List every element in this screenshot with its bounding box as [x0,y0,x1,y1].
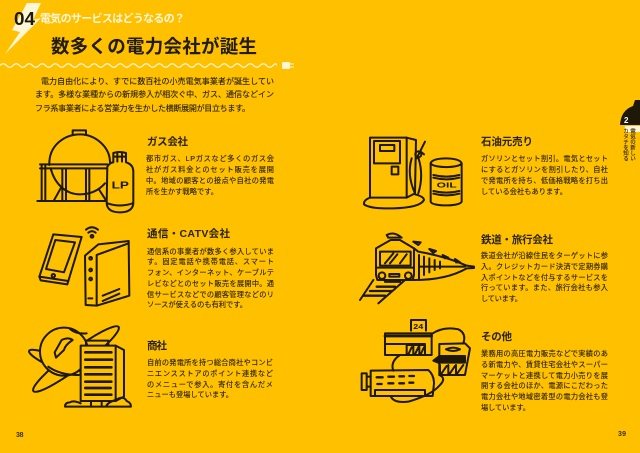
section question heading: 電気のサービスはどうなるの？ [40,11,185,25]
page number 39: 39 [618,431,626,438]
text: gas companies: 都市ガス、LPガスなど多くのガス会 [146,154,274,163]
icon: phone, wifi and router [39,227,129,306]
text: trading companies: ニエンスストアのポイント連携など [147,369,273,378]
text: others: 電力会社や地域密着型の電力会社も登 [481,392,608,401]
text: gas companies: 所を生かす戦略です。 [146,187,218,196]
text: railway and travel: 入。クレジットカード決済で定期券購 [481,262,608,271]
text: railway and travel: 行っています。また、旅行会社も参入 [481,283,608,292]
text: telecom and CATV: 通信系の事業者が数多く参入していま [147,247,274,256]
text: others: 場しています。 [481,403,530,412]
heading: telecom and CATV: 通信・CATV会社 [147,227,230,240]
text: oil wholesalers: で発電所を持ち、低価格戦略を打ち出 [481,176,608,185]
icon: train on tracks [360,233,474,303]
text: oil wholesalers: にするとガソリンを割引したり、自社 [481,165,608,174]
heading: gas companies: ガス会社 [147,135,188,148]
text: others [481,349,608,412]
text: railway and travel [481,251,608,303]
text: trading companies [147,358,273,399]
text: gas companies: 中。地域の顧客との接点や自社の発電 [146,176,274,185]
icon: lightning bolt [5,3,41,54]
text: others: 開する会社のほか、電源にこだわった [481,381,608,390]
icon: gas tank and LP cylinder [37,130,133,212]
chapter tab: カタチを知る [622,128,629,161]
intro text: 電力自由化により、すでに数百社の小売電気事業者が誕生してい [41,76,274,86]
text: oil wholesalers: している会社もあります。 [481,187,567,196]
intro text [35,76,274,113]
text: oil wholesalers [481,154,608,196]
icon: fuel pump and oil drum [364,138,462,208]
heading: others: その他 [481,330,512,343]
text: telecom and CATV: フォン、インターネット、ケーブルテ [147,268,274,277]
heading: railway and travel: 鉄道・旅行会社 [481,233,554,246]
icon: wavy cord with plug [0,62,294,69]
text: others: る新電力や、賃貸住宅会社やスーパー [481,360,608,369]
page number 38: 38 [16,432,24,439]
text: trading companies: 自前の発電所を持つ総合商社やコンビ [147,358,273,367]
text: oil wholesalers: ガソリンとセット割引。電気とセット [481,154,608,163]
title: 数多くの電力会社が誕生 [51,36,257,57]
text: others: マーケットと連携して電力小売りを展 [481,371,608,380]
icon: convenience store, shop and factory: 24 [413,324,423,331]
text: railway and travel: 入ポイントなどを付与するサービスを [481,273,608,282]
icon: convenience store, shop and factory [362,320,470,402]
heading: trading companies: 商社 [147,339,168,352]
icon: fuel pump and oil drum: OIL [437,180,457,189]
chapter tab: 2 [624,116,629,125]
heading: oil wholesalers: 石油元売り [481,135,533,148]
icon: gas tank and LP cylinder: LP [112,180,129,191]
text: telecom and CATV: 信サービスなどでの顧客管理などのリ [147,290,274,299]
text: telecom and CATV: レビなどとのセット販売を展開中。通 [147,279,274,288]
text: telecom and CATV [147,247,274,309]
text: railway and travel: しています。 [481,294,522,303]
text: trading companies: のメニューで参入。寄付を含んだメ [147,380,273,389]
section number: 04 [14,9,35,29]
text: others: 業務用の高圧電力販売などで実績のあ [481,349,608,358]
text: telecom and CATV: す。固定電話や携帯電話、スマート [147,257,274,266]
chapter tab: 電気の新しい [629,128,636,161]
text: gas companies: 社がガス料金とのセット販売を展開 [146,165,274,174]
text: gas companies [146,154,274,196]
intro text: ます。多様な業種からの新規参入が相次ぐ中、ガス、通信などイン [35,89,274,99]
icon: globe and office building [27,320,131,407]
intro text: フラ系事業者による営業力を生かした横断展開が目立ちます。 [35,103,250,113]
text: telecom and CATV: ソースが使えるのも有利です。 [147,300,247,309]
text: railway and travel: 鉄道会社が沿線住民をターゲットに参 [481,251,608,260]
text: trading companies: ニューも登場しています。 [147,390,233,399]
chapter tab [620,100,640,161]
